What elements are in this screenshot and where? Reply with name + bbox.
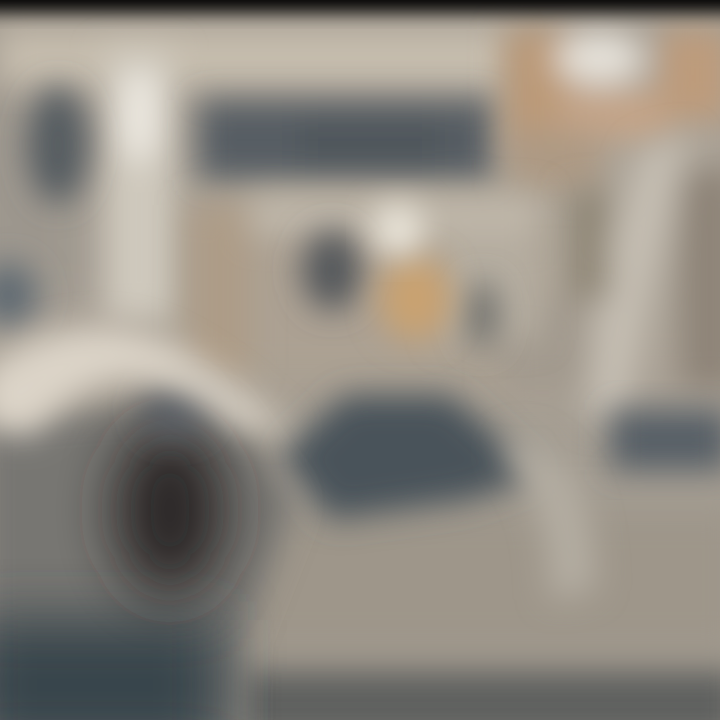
- light curved stand: [500, 435, 595, 600]
- dark central furry shape: [115, 425, 225, 595]
- top black band: [0, 0, 720, 12]
- dark window panel: [198, 100, 493, 180]
- right blue shadow: [610, 410, 720, 470]
- top beige band: [0, 30, 510, 86]
- central blue shadow: [280, 395, 540, 520]
- centre dark object: [302, 230, 499, 349]
- bottom left blue shade: [0, 620, 220, 720]
- right columns: [500, 135, 720, 420]
- orange object: [379, 256, 451, 340]
- left dark blob: [0, 87, 88, 327]
- light arc: [0, 328, 295, 436]
- white highlight: [372, 204, 424, 256]
- top right warm glow: [505, 30, 720, 190]
- lower floor: [240, 510, 720, 720]
- lower left grey mass: [0, 400, 295, 720]
- centre beige shelf: [190, 195, 540, 375]
- upper wall area: [0, 20, 720, 400]
- shaded top of dark shape: [141, 382, 209, 438]
- white column: [104, 50, 174, 320]
